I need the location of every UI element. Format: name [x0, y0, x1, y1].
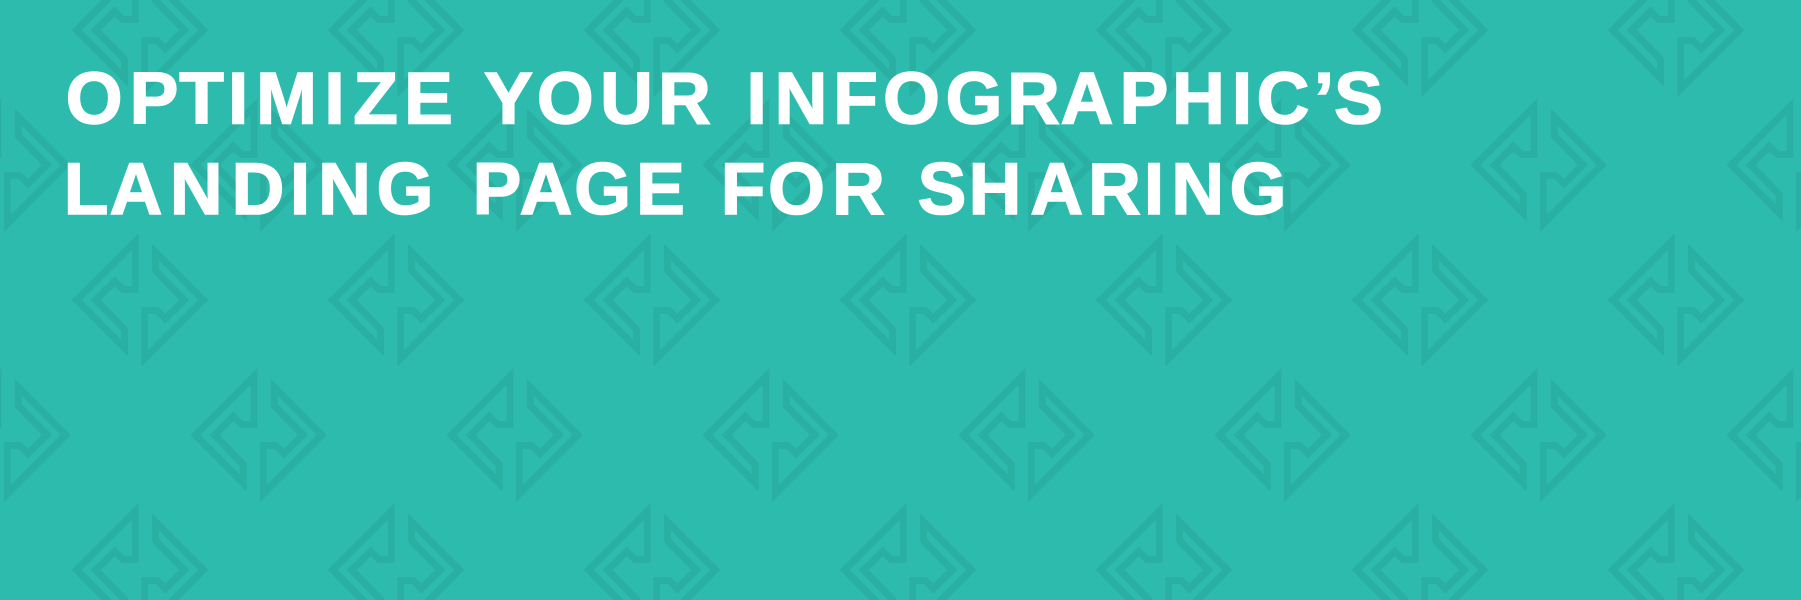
title — [64, 58, 1383, 230]
title line 1: OPTIMIZE YOUR INFOGRAPHIC’S — [66, 58, 1383, 140]
title line 2: LANDING PAGE FOR SHARING — [64, 149, 1286, 230]
